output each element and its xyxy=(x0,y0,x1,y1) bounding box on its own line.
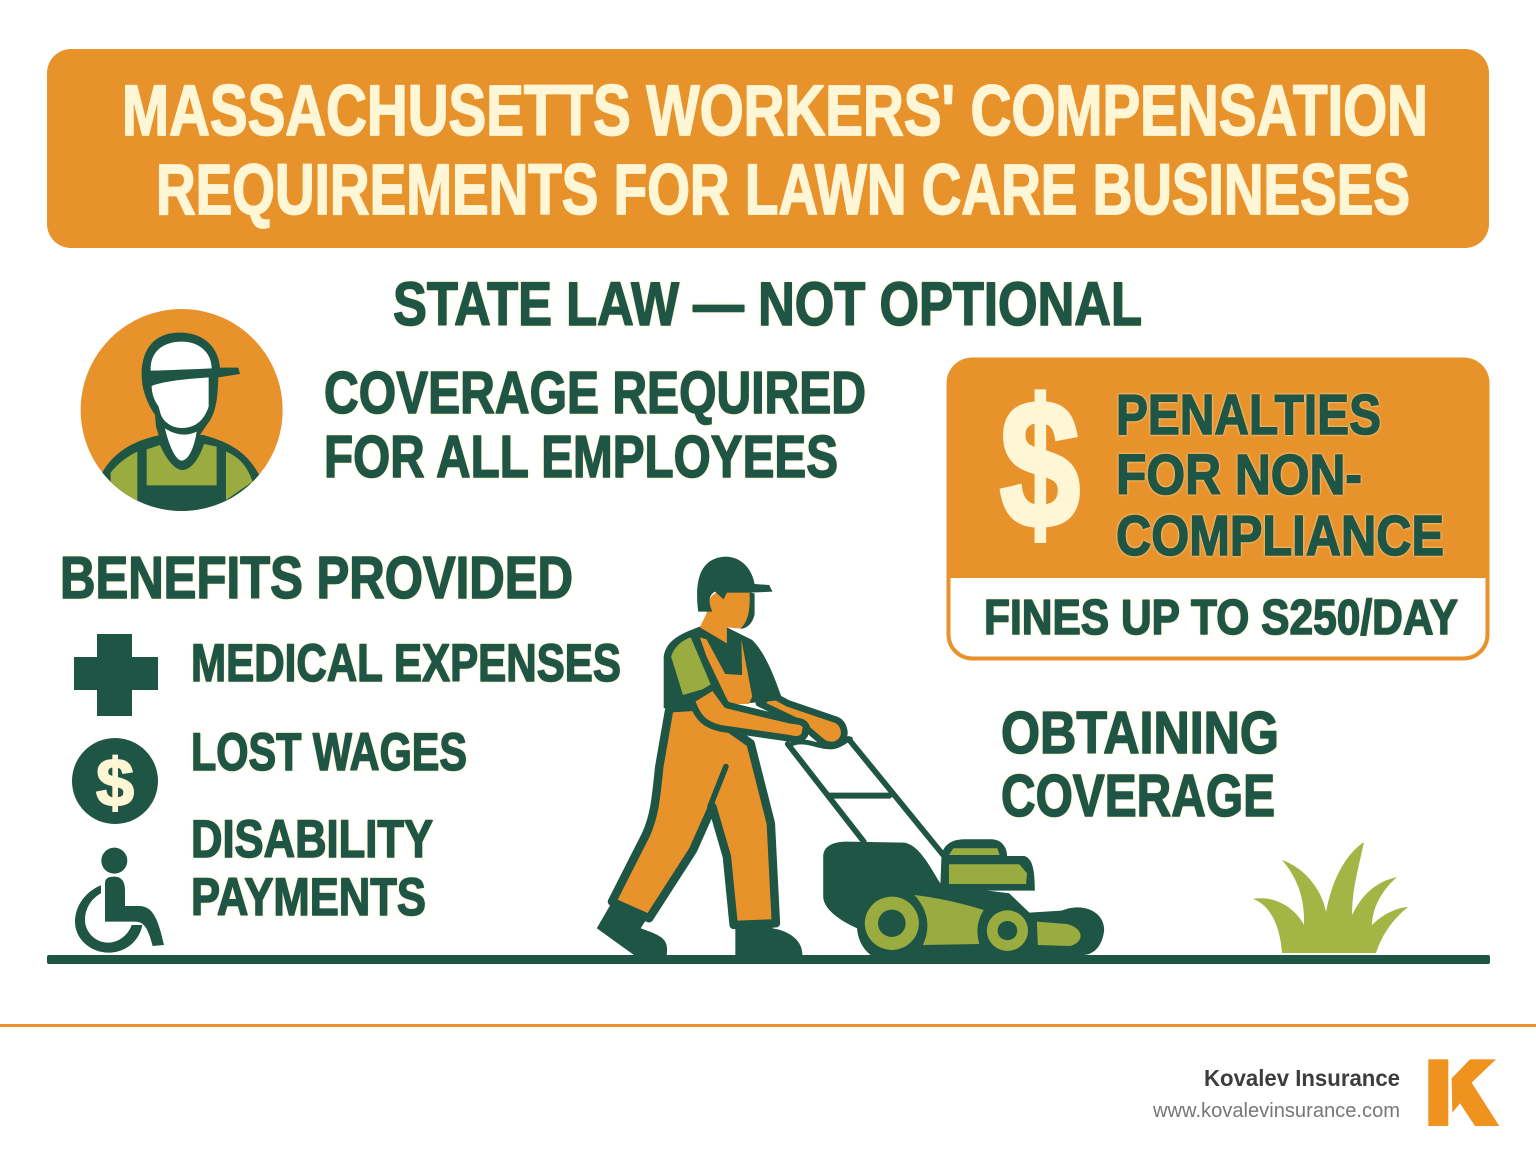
benefit: disability payments xyxy=(191,810,433,927)
text: coverage required: FOR ALL EMPLOYEES xyxy=(324,424,838,490)
logo: K xyxy=(1428,1059,1499,1126)
footer: company name: Kovalev Insurance xyxy=(1204,1065,1400,1091)
icon: grass xyxy=(1253,842,1408,953)
benefit: disability payments: DISABILITY xyxy=(191,810,433,869)
text: obtaining coverage: COVERAGE xyxy=(1001,763,1275,829)
penalties heading: FOR NON- xyxy=(1116,443,1362,507)
fines text: FINES UP TO S250/DAY xyxy=(984,591,1458,645)
text: coverage required: COVERAGE REQUIRED xyxy=(324,360,866,426)
boots xyxy=(597,905,802,955)
icon: dollar coin: $ xyxy=(96,745,134,821)
icon: large dollar: $ xyxy=(1000,362,1080,566)
overalls bib xyxy=(700,637,752,704)
footer divider xyxy=(0,1024,1536,1027)
title banner xyxy=(47,49,1489,248)
text: obtaining coverage xyxy=(1001,700,1279,829)
text: obtaining coverage: OBTAINING xyxy=(1001,700,1279,766)
back arm xyxy=(759,695,844,745)
penalties heading xyxy=(1116,383,1444,568)
icon: dollar coin xyxy=(72,738,158,824)
footer: website: www.kovalevinsurance.com xyxy=(1152,1100,1400,1122)
front arm xyxy=(691,687,806,739)
icon: wheelchair xyxy=(75,848,164,953)
illustration: man pushing lawn mower xyxy=(597,557,1104,955)
benefit: disability payments: PAYMENTS xyxy=(191,868,426,927)
heading: benefits provided: BENEFITS PROVIDED xyxy=(60,545,573,611)
penalties heading: COMPLIANCE xyxy=(1116,504,1444,568)
torso xyxy=(664,626,783,708)
icon: medical cross xyxy=(74,634,158,716)
panel: penalties xyxy=(947,358,1489,658)
heading: state law: STATE LAW — NOT OPTIONAL xyxy=(393,270,1142,338)
benefit: lost wages: LOST WAGES xyxy=(191,723,467,782)
mower handle xyxy=(788,739,943,855)
penalties heading: PENALTIES xyxy=(1116,383,1381,447)
title xyxy=(122,72,1428,230)
text: coverage required xyxy=(324,360,866,490)
sleeve xyxy=(671,637,712,695)
icon: worker portrait xyxy=(81,309,283,533)
worker legs xyxy=(612,707,776,925)
ground line xyxy=(47,955,1490,964)
head and cap xyxy=(697,557,773,643)
benefit: medical expenses: MEDICAL EXPENSES xyxy=(191,634,621,693)
mower body xyxy=(823,839,1104,955)
